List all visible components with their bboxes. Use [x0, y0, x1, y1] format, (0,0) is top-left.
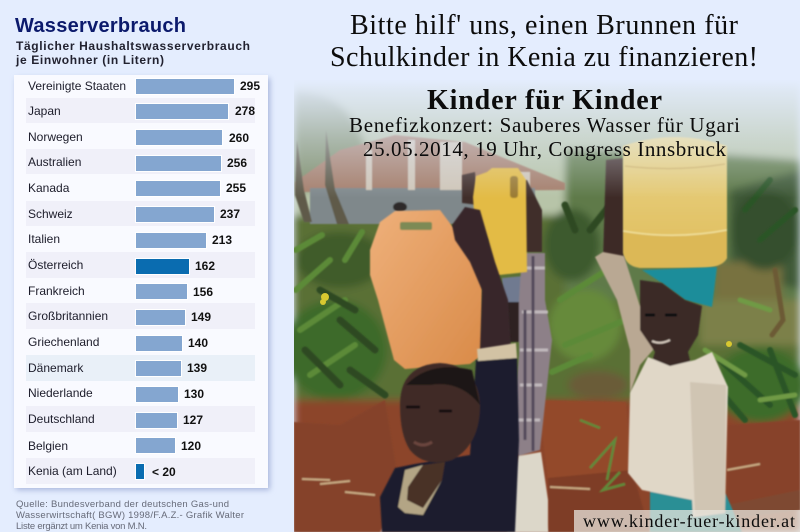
row: Griechenland: 140 — [188, 336, 208, 350]
row: Deutschland — [28, 412, 203, 428]
row: Österreich — [28, 258, 215, 274]
row: Schweiz: 237 — [220, 207, 240, 221]
left girl — [380, 343, 519, 532]
row: Großbritannien: 149 — [191, 310, 211, 324]
soil details — [294, 400, 800, 532]
row: Kanada: 255 — [226, 181, 246, 195]
subheading: Täglicher Haushaltswasserverbrauch — [16, 39, 250, 53]
row: Belgien — [28, 438, 201, 454]
photo backdrop — [283, 80, 800, 532]
middle child with plaid shirt — [462, 172, 552, 532]
row: Norwegen: 260 — [229, 131, 249, 145]
row: Großbritannien — [28, 309, 211, 326]
row: Italien: Italien — [28, 232, 60, 246]
row: Kenia (am Land): < 20 — [152, 465, 176, 479]
row: Japan: 278 — [235, 104, 255, 118]
subheading: je Einwohner (in Litern) — [15, 53, 164, 67]
row: Frankreich: Frankreich — [28, 284, 85, 298]
chart card shadow — [16, 78, 270, 490]
canister: yellow — [473, 168, 527, 276]
row: Kenia (am Land) — [28, 464, 176, 480]
raised arm: right girl — [603, 158, 624, 262]
row: Niederlande: 130 — [184, 387, 204, 401]
row: Kanada: Kanada — [28, 181, 70, 195]
teal head cloth — [642, 267, 717, 307]
row: Belgien: Belgien — [28, 439, 68, 453]
event date and place: 25.05.2014, 19 Uhr, Congress Innsbruck — [363, 137, 726, 161]
canister: orange — [370, 210, 482, 369]
row: Dänemark — [28, 360, 207, 376]
row: Vereinigte Staaten: Vereinigte Staaten — [28, 79, 126, 93]
raised arm: left girl — [452, 207, 511, 350]
house — [295, 130, 565, 224]
heading: Wasserverbrauch: Wasserverbrauch — [15, 15, 186, 37]
row: Norwegen — [28, 130, 249, 146]
row: Niederlande — [28, 386, 204, 402]
row: Vereinigte Staaten: 295 — [240, 79, 260, 93]
panel: water consumption chart — [14, 15, 270, 532]
headline: Schulkinder in Kenia zu finanzieren! — [330, 42, 758, 73]
row: Australien: Australien — [28, 155, 81, 169]
row: Österreich: Österreich — [28, 258, 83, 272]
row: Dänemark: Dänemark — [28, 361, 84, 375]
row: Niederlande: Niederlande — [28, 386, 93, 400]
headline: Bitte hilf' uns, einen Brunnen für — [350, 10, 739, 41]
row: Österreich: 162 — [195, 259, 215, 273]
bar chart — [26, 78, 260, 484]
row: Großbritannien: Großbritannien — [28, 309, 108, 323]
row: Schweiz — [28, 206, 240, 222]
row: Schweiz: Schweiz — [28, 207, 73, 221]
row: Belgien: 120 — [181, 439, 201, 453]
row: Vereinigte Staaten — [28, 78, 260, 94]
row: Japan: Japan — [28, 104, 61, 118]
source note: Liste ergänzt um Kenia von M.N. — [16, 521, 147, 532]
row: Frankreich — [28, 284, 213, 300]
row: Italien: 213 — [212, 233, 232, 247]
event title: Kinder für Kinder — [427, 85, 662, 116]
photo: children carrying water canisters — [283, 78, 800, 532]
row: Griechenland: Griechenland — [28, 335, 99, 349]
row: Dänemark: 139 — [187, 361, 207, 375]
source note: Quelle: Bundesverband der deutschen Gas-und — [16, 499, 229, 510]
chart card — [14, 75, 268, 488]
row: Italien — [28, 232, 232, 248]
row: Deutschland: 127 — [183, 413, 203, 427]
yellow flowers — [320, 293, 732, 347]
event subtitle: Benefizkonzert: Sauberes Wasser für Ugari — [349, 113, 740, 137]
row: Australien — [28, 155, 247, 172]
row: Kenia (am Land): Kenia (am Land) — [28, 464, 117, 478]
foliage and leaves — [296, 180, 795, 420]
source note: Wasserwirtschaft( BGW) 1998/F.A.Z.- Grafik Walter — [16, 510, 244, 521]
row: Norwegen: Norwegen — [28, 130, 83, 144]
canister: cream — [623, 137, 727, 268]
row: Japan — [28, 104, 255, 120]
right girl — [595, 252, 742, 532]
website banner: www.kinder-fuer-kinder.at — [583, 511, 795, 531]
top fade of photo — [294, 78, 800, 198]
row: Frankreich: 156 — [193, 285, 213, 299]
row: Griechenland — [28, 335, 208, 352]
row: Kanada — [28, 180, 246, 196]
row: Deutschland: Deutschland — [28, 412, 95, 426]
row: Australien: 256 — [227, 156, 247, 170]
